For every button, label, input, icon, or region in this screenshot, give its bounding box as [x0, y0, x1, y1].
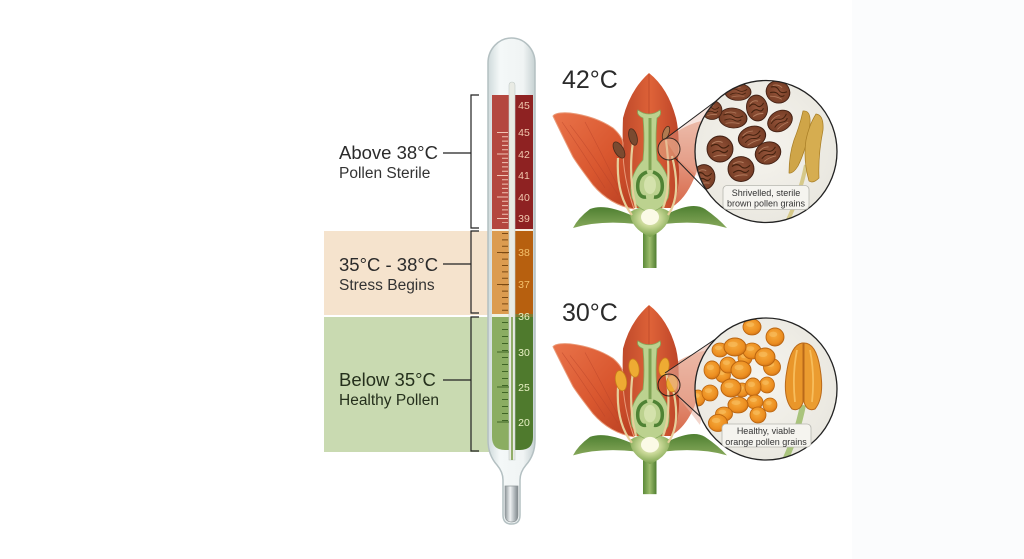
label: above 38 — [339, 142, 438, 182]
capillary — [509, 82, 515, 460]
bulb — [505, 486, 518, 522]
scale numbers: 38 — [518, 247, 530, 259]
panel: stress band — [324, 231, 492, 315]
lens caption: Shrivelled, sterile — [732, 188, 800, 198]
thermometer — [488, 38, 535, 524]
lens caption: Healthy, viable — [737, 426, 795, 436]
scale numbers: 40 — [518, 192, 530, 204]
magnified lens: healthy pollen — [691, 318, 837, 460]
scale numbers: 37 — [518, 279, 530, 291]
label: below 35: Healthy Pollen — [339, 392, 439, 409]
lens caption: brown pollen grains — [727, 198, 806, 208]
glass tube — [488, 38, 535, 524]
lens connector: 30C — [658, 338, 717, 432]
scale numbers — [518, 100, 530, 429]
right side tint — [852, 0, 1024, 559]
flower: 42C — [553, 73, 727, 268]
scale numbers: 20 — [518, 417, 530, 429]
label: below 35: Below 35°C — [339, 369, 436, 390]
heading: 30C: 30°C — [562, 299, 618, 327]
label: above 38: Pollen Sterile — [339, 165, 430, 182]
scale numbers: 36 — [518, 311, 530, 323]
brown pollen grains — [693, 78, 796, 190]
lens caption — [723, 186, 809, 210]
scale numbers: 42 — [518, 149, 530, 161]
lens connector: 42C — [658, 98, 720, 197]
magnified lens: shrivelled pollen — [693, 78, 837, 222]
label: 35 to 38 — [339, 254, 438, 294]
shrivelled anther — [787, 111, 823, 222]
healthy anther — [785, 343, 822, 460]
label: 35 to 38: 35°C - 38°C — [339, 254, 438, 275]
lens caption: orange pollen grains — [725, 437, 807, 447]
brackets and leader lines — [443, 95, 479, 451]
shrivelled anthers — [611, 125, 671, 160]
scale numbers: 25 — [518, 382, 530, 394]
orange pollen grains — [691, 319, 784, 432]
scale numbers: 39 — [518, 213, 530, 225]
heading: 42C: 42°C — [562, 66, 618, 94]
scale numbers: 30 — [518, 347, 530, 359]
label: 35 to 38: Stress Begins — [339, 277, 435, 294]
liquid bands — [492, 95, 533, 450]
lens caption — [722, 424, 811, 447]
scale numbers: 45 — [518, 127, 530, 139]
panel: healthy band — [324, 317, 492, 452]
scale numbers: 45 — [518, 100, 530, 112]
label: above 38: Above 38°C — [339, 142, 438, 163]
label: below 35 — [339, 369, 439, 409]
scale numbers: 41 — [518, 170, 530, 182]
flower: 30C — [553, 305, 727, 494]
scale ticks — [497, 132, 509, 422]
healthy anthers — [614, 357, 678, 392]
